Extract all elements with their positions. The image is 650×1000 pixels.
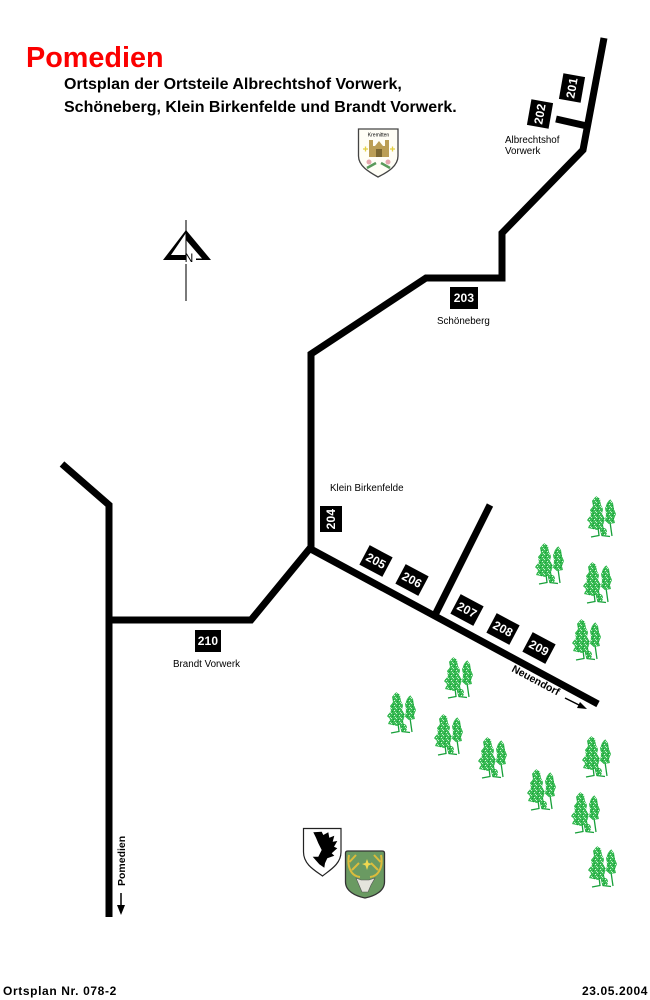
forest trees (387, 496, 617, 887)
place label: Albrechtshof Vorwerk (505, 135, 560, 157)
direction label: Neuendorf (510, 663, 587, 709)
house number 208: 208 (491, 618, 515, 640)
house number 204 (320, 506, 342, 532)
house number 206: 206 (400, 569, 424, 591)
road network (62, 38, 604, 917)
footer: plan number: Ortsplan Nr. 078-2 (3, 984, 117, 998)
house number 204: 204 (324, 509, 338, 529)
house number 203: 203 (454, 291, 474, 305)
icon: Kremitten coat of arms: Kremitten (368, 132, 389, 138)
house number 201 (559, 73, 585, 103)
place label: Brandt Vorwerk: Brandt Vorwerk (173, 659, 240, 670)
house number 201: 201 (563, 77, 581, 99)
house number 207: 207 (455, 599, 479, 621)
place label: Albrechtshof Vorwerk: Vorwerk (505, 146, 540, 157)
house number 210: 210 (198, 634, 218, 648)
place label: Schöneberg: Schöneberg (437, 316, 490, 327)
direction label: Pomedien (116, 836, 128, 915)
icon: eagle coat of arms (304, 828, 341, 876)
subtitle (64, 76, 457, 116)
subtitle: Schöneberg, Klein Birkenfelde und Brandt Vorwerk. (64, 99, 457, 116)
house number 205: 205 (364, 550, 388, 572)
house number 207 (450, 594, 484, 626)
title: Pomedien (26, 42, 164, 74)
footer: date: 23.05.2004 (582, 984, 648, 998)
house number 209 (522, 632, 556, 664)
direction label: Neuendorf: Neuendorf (510, 663, 562, 699)
house number 206 (395, 564, 429, 596)
subtitle: Ortsplan der Ortsteile Albrechtshof Vorwerk, (64, 76, 402, 93)
direction label: Pomedien: Pomedien (116, 836, 128, 886)
icon: north arrow: N (185, 251, 193, 265)
house number 209: 209 (527, 637, 551, 659)
house number 202 (527, 99, 553, 129)
icon: Kremitten coat of arms (358, 129, 398, 177)
house number 202: 202 (531, 103, 549, 125)
icon: north arrow (163, 220, 211, 301)
icon: stag coat of arms (346, 851, 384, 898)
house number 208 (486, 613, 520, 645)
house number 205 (359, 545, 393, 577)
house number 203 (450, 287, 478, 309)
house number 210 (195, 630, 221, 652)
place label: Albrechtshof Vorwerk: Albrechtshof (505, 135, 560, 146)
place label: Klein Birkenfelde: Klein Birkenfelde (330, 483, 404, 494)
